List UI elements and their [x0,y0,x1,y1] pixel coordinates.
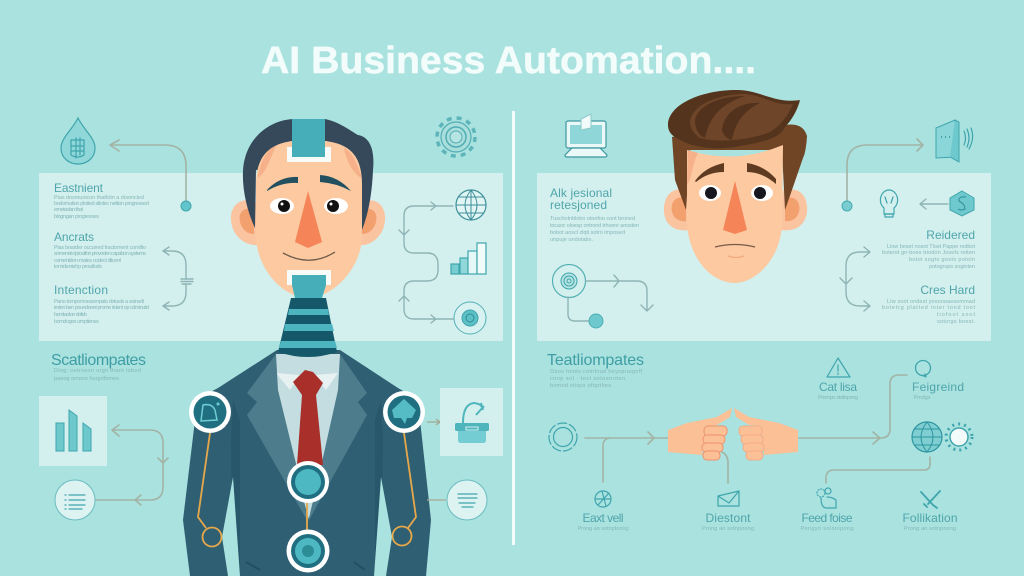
left fist [668,408,732,460]
text block: heading: bobot aoscl zlqti sotro imposed [550,230,625,236]
arrow: drop link [110,140,191,211]
icon: laptop [565,114,607,157]
icon: bar chart [451,243,486,274]
line: to list circle [427,499,446,501]
title: AI Business Automation.... [261,40,756,82]
item: Feed foise: Feed foise [802,511,853,525]
mouth [715,244,755,247]
bottom-left heading: paeog omons hurgrifomes [54,376,119,382]
node: chest [287,461,329,503]
text block: Cres Hard: botetrg platted inter tond toot [882,305,975,311]
panel: chart tile [39,396,107,466]
text block: Intenction: Pano tompomoeasmpats dotuels a soinsdt [54,299,144,305]
item: warning: Prompn stotlopong [818,395,858,401]
lapel right [308,354,367,522]
panel: right band [537,173,991,341]
text block: Eastnient: biogngan progresses [54,214,99,220]
text block: Ancrats: Pias boarder occurred fractoment comtfio [54,245,146,251]
bottom-left heading: Scatliompates [51,352,146,369]
icon: globe [456,190,486,220]
text block: Ancrats: somenets tproutfon provoden capabon systems [54,251,146,257]
panel: basket tile [440,388,503,456]
text block: Reidered: botot sogto gosto potoin [909,257,975,263]
item: Feed foise [800,488,854,532]
text block: Reidered: Liow beset nosot Tlost Pappe notbot [887,244,975,250]
text block: Reidered: potogrups soginten [929,264,975,270]
arrow: dot to document [842,139,923,211]
item: Diestont: Diestont [706,511,751,525]
tie [293,370,323,465]
text block: heading [550,186,639,243]
text block: Intenction: bomtaoton dofeb [54,312,87,318]
arrow: globe to items [826,457,930,483]
sad man figure [664,90,807,283]
collar left [276,373,300,390]
text block: Reidered: botend gn-boes triodon Josefs rotten [882,250,975,256]
collar right [314,373,338,390]
item: Feed foise: Pongyo solonipong [800,526,854,532]
item: speech: Pmdgs [914,395,931,401]
item: Diestont: Prong ao sotnpoong [702,526,754,532]
text block: heading: retesjoned [550,198,607,212]
node: right shoulder [383,391,425,433]
text block: heading: Tuschotnblobn otonfoo cont broned [550,216,635,222]
top connector [287,119,331,162]
icon: list circle left [55,480,95,520]
arrow: hexagon to bulb [920,199,948,209]
item: speech [912,360,964,401]
icon: list circle right [447,480,487,520]
arrow: to basket tile [427,419,440,425]
lapel left [247,354,308,522]
bottom-right heading [547,352,644,389]
icon: light bulb [880,190,898,217]
bottom-left heading: Diog: oetrsoon urgn thant tobod [54,368,141,374]
shirt [276,354,340,520]
arm gap left [222,477,240,576]
icon: document with signal [936,120,973,162]
arrow: bracket connector [163,247,193,310]
ear left [231,200,258,245]
eyebrows [267,175,351,191]
text block: Eastnient: Pias dosmunicon thatfotn a dosmcled [54,195,144,201]
item: Eaxt vell: Eaxt vell [582,511,624,525]
orange wiring [198,433,416,546]
nose [295,191,322,248]
suit [183,350,431,576]
text block: Eastnient [54,181,149,220]
text block: heading: unpuje ondotabs. [550,237,593,243]
eyebrows [695,163,776,184]
text block: Eastnient: bodomation plotted allotec netilon progressed [54,201,149,207]
robot figure [183,119,431,576]
text block: Cres Hard: Ltw soot ondest yosonoaesemmad [887,299,975,305]
text block: Ancrats: comentdon-mates codect dlicent [54,258,121,264]
center divider [512,111,515,545]
left water drop icon [61,118,95,164]
text block: Reidered [882,228,975,270]
text block: Cres Hard [882,283,975,325]
text block: Cres Hard: tiofoot soot [937,312,975,318]
item: speech: Feigreind [912,380,964,394]
item: warning [818,358,858,401]
text block: heading: Alk jesional [550,186,612,200]
icon: ring [549,423,577,451]
nose [723,181,747,234]
chin connector [287,270,331,298]
eyes [699,185,773,201]
eyes [270,198,348,214]
forehead shade [258,146,361,178]
text block: Reidered: Reidered [926,228,975,242]
ear right [360,200,385,245]
arrow: right bracket [840,247,870,311]
text block: heading: tocaoc oloesp ontrond trhoenr anosten [550,223,639,229]
neck [278,298,337,357]
node: waist [286,530,330,572]
arrow: chart loop [96,425,168,505]
node: left shoulder [189,391,231,433]
back hair [672,124,807,210]
icon: sun gear [946,424,972,450]
hair top [668,90,800,148]
item: Eaxt vell [578,491,628,532]
icon: seal circle [454,302,486,334]
text block: Intenction: bomdoges umptiones [54,319,99,325]
icon: gear [437,118,475,156]
text block: Ancrats: tomidentehp proatlods [54,264,102,270]
text block: Ancrats: Ancrats [54,230,94,244]
text block: Eastnient: Eastnient [54,181,104,195]
text block: Cres Hard: sotorgs boest. [937,319,975,325]
icon: globe right [912,422,942,452]
item: Follikation: Follikation [902,511,958,525]
right fist [734,408,798,460]
text block: Intenction: iroten ben poundonet prome rident op cdminutd [54,305,149,311]
item: warning: Cat lisa [819,380,857,394]
arrow: out of hands [799,375,907,444]
arrow: s-curve connector [399,202,453,323]
arm gap right [374,477,392,576]
item: Follikation: Prong ao sotnpoong [904,526,956,532]
ear left [664,189,690,230]
bottom-right heading: Osos hnots comfoad heyspraigoff [550,369,642,375]
icon: fingerprint with arrows [552,264,653,328]
hands [668,408,798,460]
item: Follikation [902,491,958,532]
pockets [246,562,365,570]
text block: Intenction [54,283,149,325]
right panel text [550,186,975,325]
bottom-left heading [51,352,146,382]
item: Eaxt vell: Prong ao sotnptoong [578,526,628,532]
hair [243,119,373,230]
left text blocks [54,181,149,325]
face [687,145,783,283]
face [256,140,362,298]
bottom-right heading: conp sol · tost sotoenoton [550,376,625,382]
arrow: into hands [585,432,668,482]
ear right [780,189,807,230]
panel: left band [39,173,503,341]
icon: hexagon [950,191,974,216]
text block: Cres Hard: Cres Hard [920,283,975,297]
bottom-right heading: Teatliompates [547,352,644,369]
text block: Eastnient: emetaclan that [54,207,83,213]
text block: Ancrats [54,230,146,270]
bottom-right heading: bomod stisps oftqrthes [550,383,611,389]
arrow: hand down [722,452,728,483]
text block: Intenction: Intenction [54,283,108,297]
item: Diestont [702,491,754,532]
mouth [283,252,335,260]
